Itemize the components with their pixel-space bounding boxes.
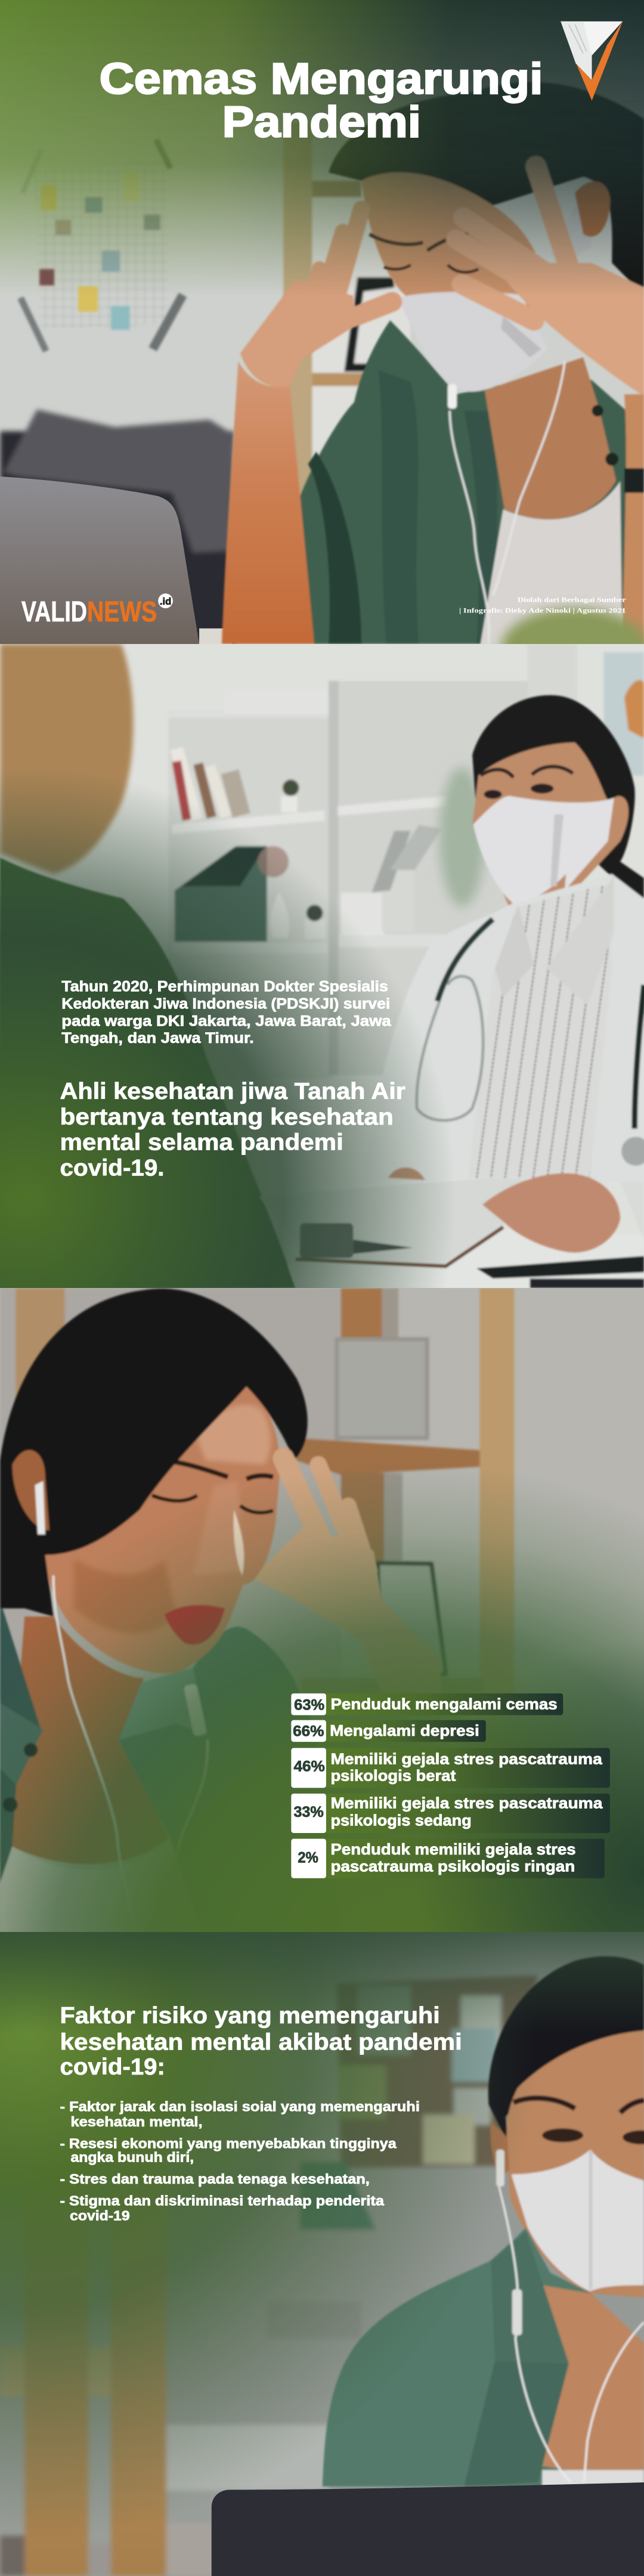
heading: risk factors: kesehatan mental akibat pandemi xyxy=(60,2029,462,2055)
risk factor list xyxy=(60,2098,420,2224)
stat: 33% moderate: psikologis sedang xyxy=(330,1813,472,1829)
title: Cemas Mengarungi xyxy=(100,55,543,103)
logo: Validnews: NEWS xyxy=(87,596,157,628)
panel: survey intro xyxy=(0,644,644,1288)
stat: 2% mild: Penduduk memiliki gejala stres xyxy=(330,1841,576,1858)
stat: 2% mild xyxy=(291,1839,605,1878)
heading: risk factors xyxy=(60,2002,462,2080)
headline: mental health experts xyxy=(60,1079,405,1181)
risk factor list: angka bunuh diri, xyxy=(70,2150,194,2165)
source credit xyxy=(459,596,626,615)
logo: V mark xyxy=(561,21,623,101)
risk factor list: covid-19 xyxy=(70,2208,130,2224)
title: Pandemi xyxy=(222,98,421,146)
sofa xyxy=(0,410,235,644)
stat: 63% anxious: 63% xyxy=(294,1697,324,1713)
stat: 46% severe: Memiliki gejala stres pascatrauma xyxy=(330,1751,603,1767)
room background xyxy=(0,1932,644,2576)
risk factor list: - Stres dan trauma pada tenaga kesehatan, xyxy=(60,2171,370,2187)
survey text: Kedokteran Jiwa Indonesia (PDSKJI) survei xyxy=(61,996,390,1013)
stat: 46% severe: 46% xyxy=(293,1759,325,1775)
doctor xyxy=(361,695,644,1252)
stat: 46% severe: psikologis berat xyxy=(330,1768,456,1785)
logo: Validnews: VALID xyxy=(21,596,87,628)
risk factor list: kesehatan mental, xyxy=(70,2114,203,2129)
woman at laptop xyxy=(323,1956,644,2487)
desk and clipboard xyxy=(259,1174,644,1288)
woman holding her temple xyxy=(0,1289,441,1932)
gradient overlay xyxy=(0,1288,644,1932)
stat: 33% moderate: 33% xyxy=(293,1804,324,1820)
wood shelf and frame background xyxy=(283,123,411,513)
panel: cover section xyxy=(0,0,644,690)
wall pinboard photo background xyxy=(20,140,183,351)
laptop xyxy=(212,2482,644,2576)
stat: 2% mild: pascatrauma psikologis ringan xyxy=(330,1859,575,1875)
heading: risk factors: covid-19: xyxy=(60,2054,165,2080)
gradient overlay xyxy=(0,1932,644,2576)
stat: 63% anxious: Penduduk mengalami cemas xyxy=(330,1696,558,1713)
title xyxy=(100,61,540,138)
source credit: | Infografis: Dieky Ade Ninoki | Agustus 2021 xyxy=(459,607,626,615)
headline: mental health experts: Ahli kesehatan jiwa Tanah Air xyxy=(60,1079,405,1104)
source credit: Diolah dari Berbagai Sumber xyxy=(518,596,626,604)
panel: survey statistics xyxy=(0,1288,644,1932)
stat: 33% moderate: Memiliki gejala stres pascatrauma xyxy=(330,1795,603,1812)
stat: 66% depressed: Mengalami depresi xyxy=(330,1723,479,1739)
stat: 2% mild: 2% xyxy=(298,1850,318,1866)
stat: 33% moderate xyxy=(291,1794,610,1833)
stat: 66% depressed: 66% xyxy=(293,1723,324,1739)
survey text: pada warga DKI Jakarta, Jawa Barat, Jawa xyxy=(61,1014,391,1030)
gradient overlay xyxy=(0,0,644,296)
woman with mask xyxy=(222,82,644,644)
back of patient xyxy=(0,644,296,1288)
stat: 66% depressed xyxy=(291,1720,486,1742)
survey text xyxy=(61,979,391,1046)
plant blur xyxy=(494,600,644,644)
gradient overlay xyxy=(0,644,644,1288)
heading: risk factors: Faktor risiko yang memengaruhi xyxy=(60,2002,440,2029)
headline: mental health experts: mental selama pandemi xyxy=(60,1130,343,1156)
survey text: Tahun 2020, Perhimpunan Dokter Spesialis xyxy=(61,979,388,995)
white shirt hem and dark seat xyxy=(199,628,232,644)
headline: mental health experts: covid-19. xyxy=(60,1155,165,1181)
stat: 46% severe xyxy=(291,1748,610,1788)
headline: mental health experts: bertanya tentang kesehatan xyxy=(60,1104,394,1130)
stat: 63% anxious xyxy=(291,1693,563,1715)
risk factor list: - Stigma dan diskriminasi terhadap penderita xyxy=(60,2193,384,2209)
risk factor list: - Resesi ekonomi yang menyebabkan tingginya xyxy=(60,2135,397,2151)
wooden shelf background xyxy=(0,1288,514,1707)
laptop xyxy=(0,476,199,644)
risk factor list: - Faktor jarak dan isolasi soial yang memengaruhi xyxy=(60,2098,420,2114)
plant xyxy=(439,767,485,907)
panel: risk factors xyxy=(0,1932,644,2576)
logo: Validnews xyxy=(21,593,173,628)
survey text: Tengah, dan Jawa Timur. xyxy=(61,1030,254,1046)
bookshelf background xyxy=(168,644,644,1079)
logo: Validnews: .id xyxy=(160,596,171,607)
